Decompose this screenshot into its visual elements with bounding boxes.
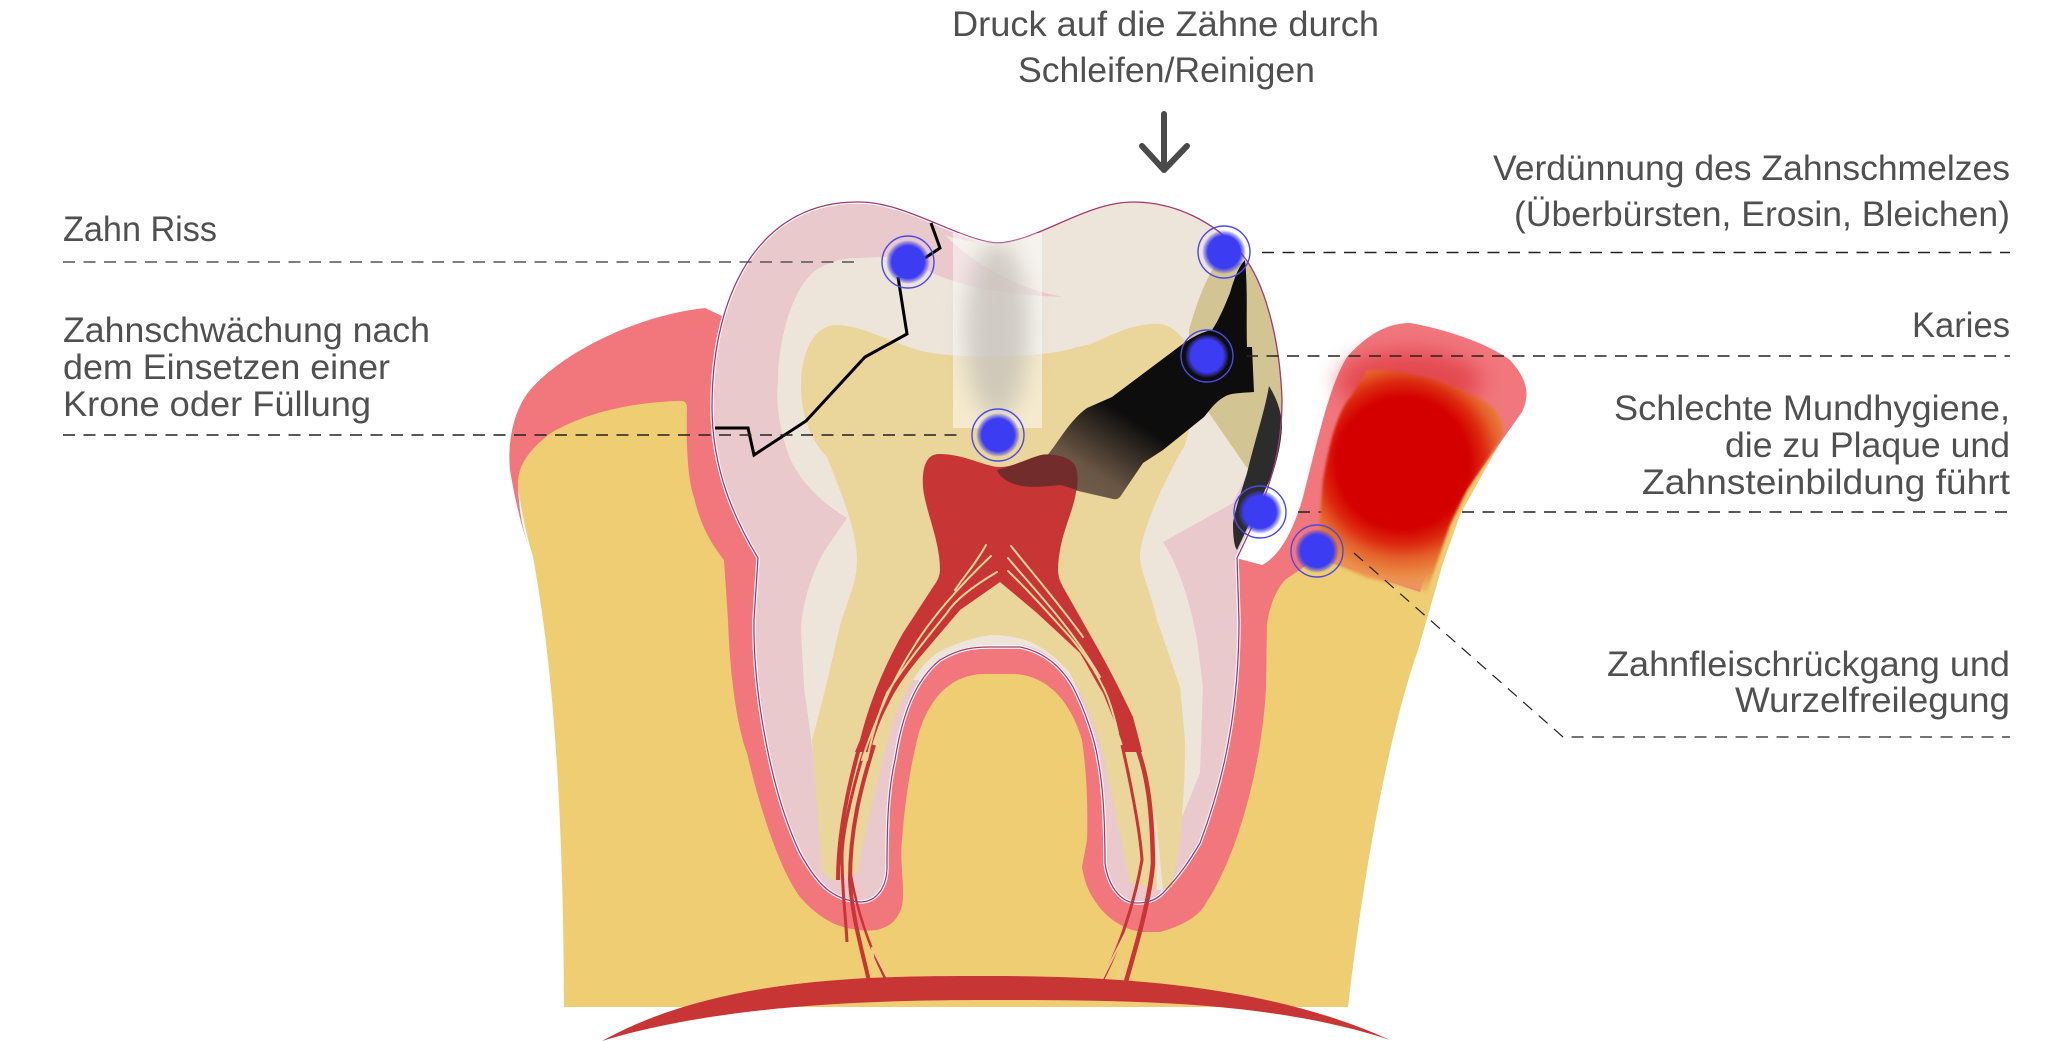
tooth surface line (712, 202, 1282, 903)
arch cream band (913, 635, 1080, 695)
label: enamel thinning: (Überbürsten, Erosin, Bleichen) (1514, 195, 2010, 234)
marker: caries (1181, 330, 1233, 382)
inflamed gum area (1317, 370, 1503, 592)
dentin (801, 324, 1192, 890)
crack (715, 223, 940, 455)
label: pressure: Schleifen/Reinigen (1018, 51, 1315, 90)
tartar deposit (1233, 386, 1282, 550)
tooth halo and enamel (712, 202, 1282, 903)
label: gum recession (1607, 645, 2010, 720)
label: poor oral hygiene (1614, 389, 2010, 502)
label: gum recession: Zahnfleischrückgang und (1607, 645, 2010, 684)
label: enamel thinning: Verdünnung des Zahnschmelzes (1493, 149, 2010, 188)
label: weakening: Zahnschwächung nach (63, 311, 430, 350)
label: gum recession: Wurzelfreilegung (1735, 681, 2010, 720)
cream enamel layer (777, 202, 1282, 880)
label: weakening (63, 311, 430, 424)
tan decayed enamel (1189, 262, 1282, 468)
dashed leader: Zahnfleischrückgang (1354, 553, 2010, 737)
label: weakening: dem Einsetzen einer (63, 348, 390, 387)
pressure arrow (1142, 114, 1187, 170)
gum (509, 308, 1526, 932)
label: crack: Zahn Riss (63, 210, 217, 249)
label: pressure: Druck auf die Zähne durch (952, 5, 1379, 44)
marker: weakening (972, 409, 1024, 461)
pulp chamber and root canals (855, 454, 1142, 752)
translucent worn zone (953, 233, 1042, 428)
label: enamel thinning (1493, 149, 2010, 234)
dashed leader: Verdünnung (1262, 252, 2010, 254)
artery (602, 976, 1390, 1041)
dashed leader: Zahnschwächung (63, 434, 963, 436)
label: caries: Karies (1912, 306, 2010, 345)
cream sliver in right root (1155, 807, 1163, 890)
label: pressure (952, 5, 1379, 90)
marker: enamel thinning (1198, 226, 1250, 278)
dashed leader: Mundhygiene (1298, 511, 2010, 513)
marker: gum recession (1291, 525, 1343, 577)
nerves and vessels (838, 545, 1153, 995)
tooth (712, 202, 1282, 995)
dashed leader: Karies (1246, 355, 2010, 357)
caries reaching the pulp (997, 454, 1078, 490)
caries cavity (1046, 260, 1254, 499)
label: poor oral hygiene: Schlechte Mundhygiene, (1614, 389, 2010, 428)
jaw bone (516, 390, 1510, 1007)
label: poor oral hygiene: die zu Plaque und (1725, 426, 2010, 465)
marker: plaque (1234, 486, 1286, 538)
glow on the gum (1338, 350, 1482, 414)
grey worn shadow (965, 242, 1029, 418)
marker: crack (882, 236, 934, 288)
label: poor oral hygiene: Zahnsteinbildung führt (1642, 463, 2010, 502)
dashed leader: Zahn Riss (63, 261, 862, 263)
label: weakening: Krone oder Füllung (63, 385, 371, 424)
